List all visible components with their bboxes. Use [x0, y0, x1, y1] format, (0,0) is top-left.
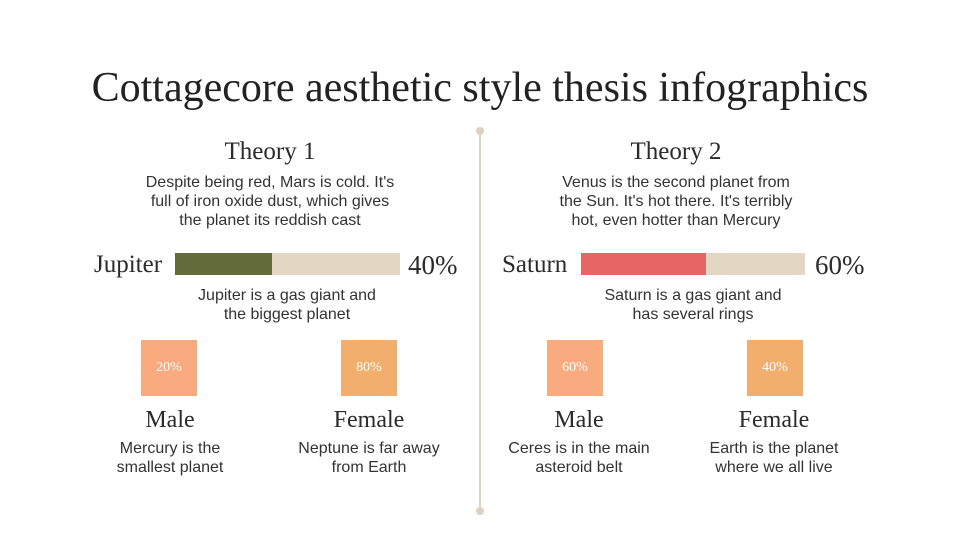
title: Cottagecore aesthetic style thesis infographics: [92, 65, 868, 111]
text jupiter: Jupiter is a gas giant and the biggest planet: [198, 287, 376, 323]
text theory 1: [146, 174, 394, 229]
panel: theory 1: [94, 138, 458, 476]
female 1: [298, 340, 440, 476]
male 2: Ceres is in the main asteroid belt: [508, 440, 650, 476]
female 2: Female: [739, 407, 809, 433]
text theory 1: Despite being red, Mars is cold. It's: [146, 174, 394, 191]
female 1: Neptune is far away from Earth: [298, 440, 440, 476]
male 1: [117, 340, 224, 476]
female 2: [710, 340, 838, 476]
bar jupiter: [94, 250, 458, 280]
bar jupiter: 40%: [408, 250, 458, 280]
male 2: 60%: [562, 360, 588, 375]
bar saturn: Saturn: [502, 251, 567, 278]
text theory 2: the Sun. It's hot there. It's terribly: [560, 193, 792, 210]
male 2: [508, 340, 650, 476]
male 1: 20%: [156, 360, 182, 375]
male 1: Male: [145, 407, 195, 433]
female 1: 80%: [356, 360, 382, 375]
male 1: Mercury is the smallest planet: [117, 440, 223, 476]
bar saturn: 60%: [815, 250, 864, 280]
panel: theory 2: [502, 138, 864, 476]
text theory 1: the planet its reddish cast: [179, 212, 361, 229]
heading theory 2: Theory 2: [631, 138, 721, 165]
text theory 1: full of iron oxide dust, which gives: [151, 193, 389, 210]
male 2: Male: [554, 407, 604, 433]
text theory 2: hot, even hotter than Mercury: [572, 212, 780, 229]
text saturn: Saturn is a gas giant and has several rings: [604, 287, 782, 323]
text theory 2: Venus is the second planet from: [562, 174, 790, 191]
bar saturn: [502, 250, 864, 280]
text theory 2: [560, 174, 792, 229]
female 2: Earth is the planet where we all live: [710, 440, 838, 476]
bar jupiter: Jupiter: [94, 251, 162, 278]
divider line: [476, 127, 484, 515]
female 1: Female: [334, 407, 404, 433]
female 2: 40%: [762, 360, 788, 375]
heading theory 1: Theory 1: [225, 138, 315, 165]
